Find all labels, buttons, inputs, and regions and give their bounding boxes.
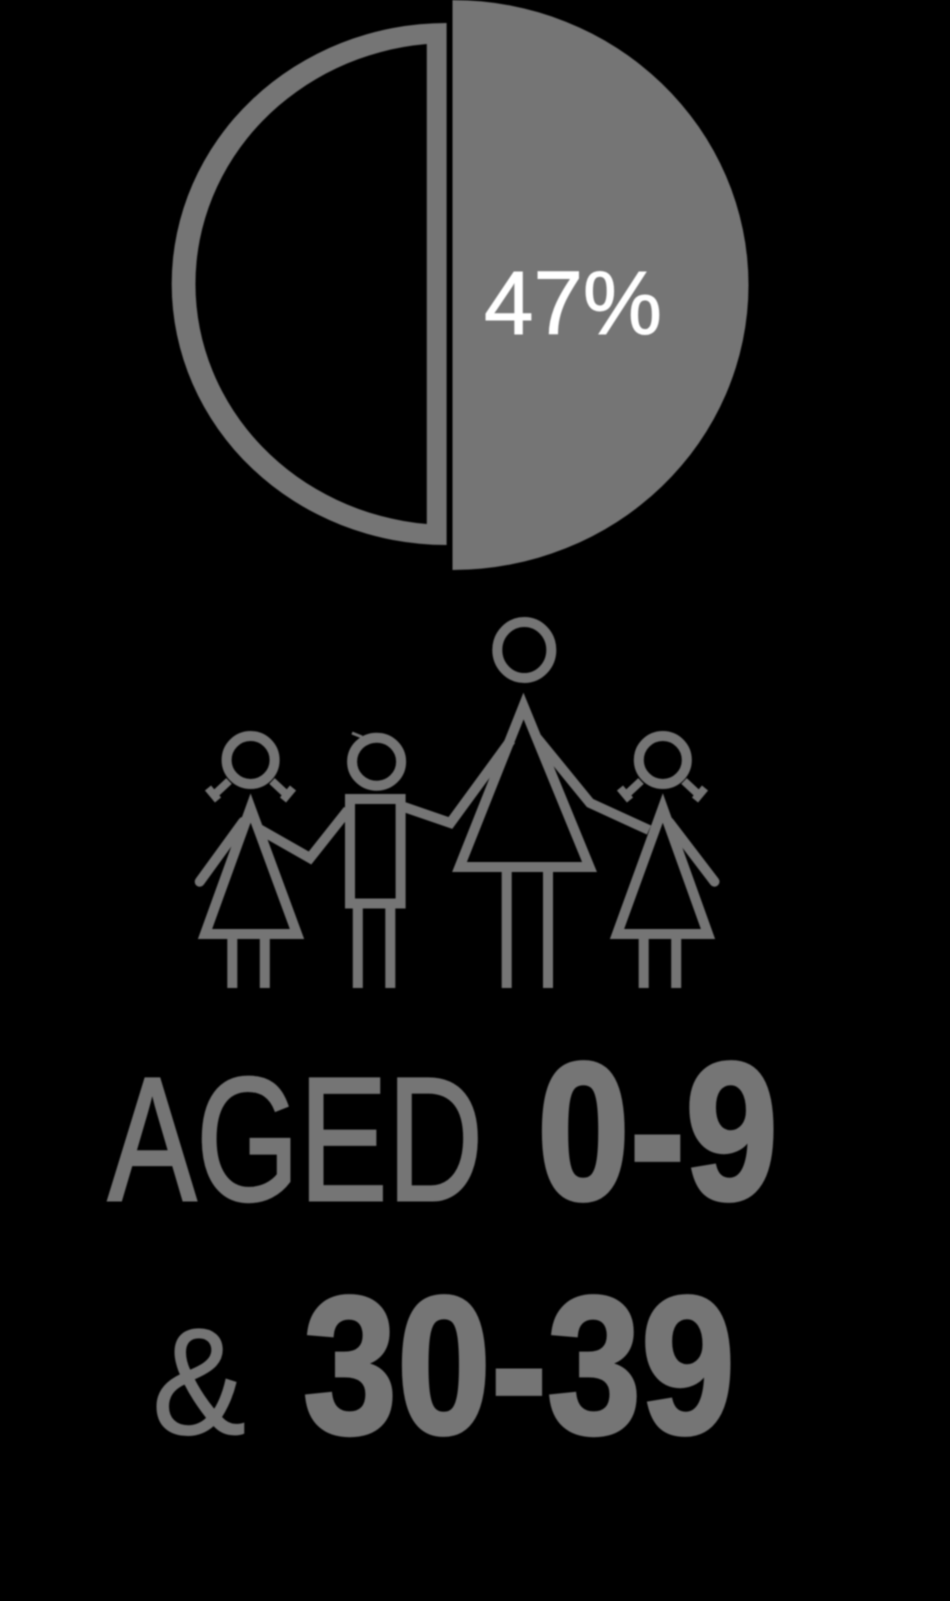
figure: boy — [259, 733, 401, 988]
figure: left girl — [200, 736, 297, 988]
icon: family of four holding hands — [200, 622, 714, 988]
pie value label: 47% — [484, 254, 662, 354]
label: AGED 0-9: AGED — [108, 1042, 483, 1238]
label: AGED 0-9: 0-9 — [537, 1022, 778, 1241]
label: & 30-39 — [152, 1256, 735, 1475]
figure: right girl — [617, 736, 714, 988]
label: AGED 0-9 — [108, 1022, 778, 1241]
pie chart: 47 percent — [172, 0, 748, 570]
figure: mother — [404, 622, 649, 988]
pie segment: filled 47 percent — [452, 0, 748, 570]
label: & 30-39: & — [152, 1297, 246, 1467]
pie segment: remaining outline — [172, 23, 447, 545]
label: & 30-39: 30-39 — [303, 1256, 735, 1475]
